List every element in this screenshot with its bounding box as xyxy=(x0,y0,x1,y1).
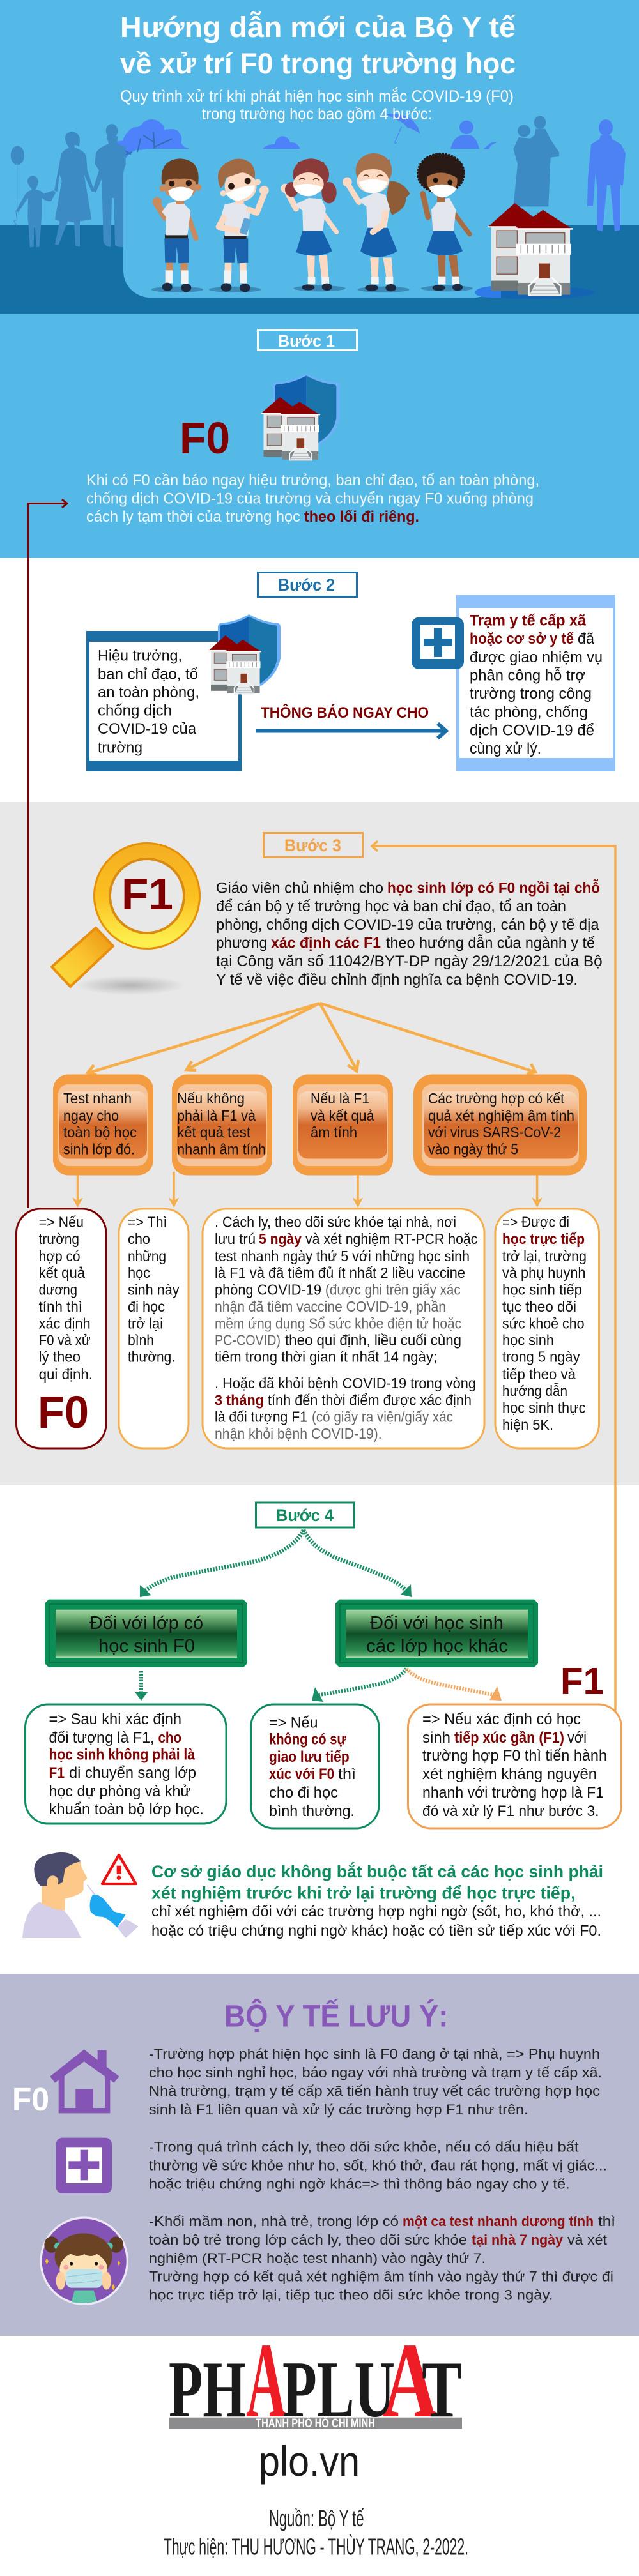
text block: step 3 description: Giáo viên chủ nhiệm cho xyxy=(216,880,383,897)
step 3 xyxy=(17,833,603,1448)
case 2: not F1 and negative xyxy=(172,1074,272,1175)
text block: school leadership: COVID-19 của xyxy=(98,720,197,738)
outcome: attend school directly: trở lại, trường xyxy=(502,1248,587,1264)
outcome: attend school directly: hướng dẫn xyxy=(502,1383,567,1399)
outcome: attend school directly: học sinh thực xyxy=(502,1400,586,1416)
outcome: F0 class: cho xyxy=(158,1729,181,1746)
student 2 xyxy=(209,159,269,292)
text block: note 2: -Trong quá trình cách ly, theo dõi sức khỏe, nếu có dấu hiệu bất xyxy=(149,2139,579,2155)
text block: step 3 description: Y tế về việc điều chỉnh định nghĩa ca bệnh COVID-19. xyxy=(216,971,578,989)
outcome: close contact: trường hợp F0 thì tiến hành xyxy=(422,1747,607,1764)
outcome: F0 class: di chuyển sang lớp xyxy=(69,1764,196,1782)
heading: Bước 4: Bước 4 xyxy=(276,1506,334,1525)
arrow: F1 return line to step 3 xyxy=(372,841,615,1711)
outcome: return to school normally: những xyxy=(128,1248,166,1264)
text block: medical station: được giao nhiệm vụ xyxy=(470,649,603,666)
text block: school leadership: chống dịch xyxy=(98,702,172,720)
outcome: attend school directly: học trực tiếp xyxy=(502,1231,585,1247)
text block: note 3: tại nhà 7 ngày xyxy=(472,2232,563,2248)
text block: note 1 xyxy=(149,2046,602,2118)
outcome: attend school directly: tục theo dõi xyxy=(502,1298,576,1315)
text block: note 1: -Trường hợp phát hiện học sinh là F0 đang ở tại nhà, => Phụ huynh xyxy=(149,2046,600,2062)
outcome: close contact: sinh xyxy=(422,1729,450,1746)
outcome: isolation conditions: nhận đã tiêm vaccine COVID-19, phần xyxy=(215,1298,446,1315)
arrow: to close contact case xyxy=(406,1669,502,1701)
outcome: no contact: bình thường. xyxy=(269,1803,355,1820)
case 1: test all class: ngay cho xyxy=(63,1107,119,1124)
text block: note 3: thì xyxy=(598,2213,615,2229)
icon: bright blue tree xyxy=(111,119,300,164)
outcome: positive F0: xác định xyxy=(39,1315,91,1332)
text block: note 3: học trực tiếp trở lại, tiếp tục theo dõi sức khỏe trong 3 ngày. xyxy=(149,2287,553,2303)
step 1 xyxy=(86,330,539,526)
outcome: return to school normally: cho xyxy=(128,1231,150,1247)
outcome: no contact: cho đi học xyxy=(269,1784,338,1801)
text block: medical station: Trạm y tế cấp xã xyxy=(470,612,587,629)
outcome: positive F0: tính thì xyxy=(39,1298,82,1315)
outcome: no contact: giao lưu tiếp xyxy=(269,1748,350,1766)
title xyxy=(120,11,516,80)
step 2 xyxy=(86,572,615,771)
website: plo.vn xyxy=(259,2437,360,2485)
outcome: no contact xyxy=(250,1704,379,1828)
text block: note 3: một ca test nhanh dương tính xyxy=(403,2213,594,2229)
arrow: down from F0 class xyxy=(135,1671,148,1701)
callout: testing not mandatory xyxy=(151,1861,603,1939)
logo: Pháp Luật: A xyxy=(246,2321,286,2440)
ministry notes xyxy=(12,1999,615,2304)
outcome: close contact xyxy=(408,1704,621,1828)
icon: parent and child silhouette right xyxy=(513,116,559,206)
text block: step 3 description: để cán bộ y tế trường học và ban chỉ đạo, tổ an toàn xyxy=(216,898,566,915)
student 1 xyxy=(151,158,203,292)
student 4 xyxy=(343,153,410,292)
outcome: positive F0: lý theo xyxy=(39,1349,81,1365)
group: students in other classes: Đối với học sinh xyxy=(370,1613,504,1633)
outcome: attend school directly: trong 5 ngày xyxy=(502,1349,580,1365)
step 4 xyxy=(26,1503,621,1828)
group: class with F0 xyxy=(45,1600,247,1667)
outcome: return to school normally: => Thì xyxy=(128,1214,167,1231)
text block: step 1 description: theo lối đi riêng. xyxy=(304,508,419,526)
outcome: return to school normally xyxy=(119,1209,189,1448)
outcome: isolation conditions xyxy=(203,1209,484,1448)
label: F0 large: F0 xyxy=(38,1388,89,1438)
case 4: negative on day 5 xyxy=(413,1074,587,1175)
case 1: test all class xyxy=(53,1074,153,1175)
outcome: isolation conditions: 5 ngày xyxy=(259,1231,302,1247)
arrows: dotted split to two groups xyxy=(140,1530,412,1597)
outcome: F0 class: học sinh không phải là xyxy=(49,1746,196,1764)
panel: header and step 1 background xyxy=(0,0,639,558)
text block: medical station: hoặc cơ sở y tế xyxy=(470,630,574,648)
panel: step 3 background xyxy=(0,802,639,1485)
panel: ministry notes background xyxy=(0,1974,639,2336)
text block: medical station: dịch COVID-19 để xyxy=(470,722,594,739)
outcome: return to school normally: học xyxy=(128,1264,150,1281)
case 2: not F1 and negative: Nếu không xyxy=(177,1090,245,1107)
outcome: attend school directly: sức khoẻ cho xyxy=(502,1315,584,1332)
case 1: test all class: Test nhanh xyxy=(63,1090,132,1107)
text block: note 1: sinh là F1 liên quan và xử lý các trường hợp F1 như trên. xyxy=(149,2102,528,2118)
logo: Pháp Luật: A xyxy=(382,2321,438,2440)
credits xyxy=(164,2505,468,2560)
subtitle: Quy trình xử trí khi phát hiện học sinh mắc COVID-19 (F0) xyxy=(120,87,514,105)
callout: testing not mandatory: xét nghiệm trước khi trở lại trường để học trực tiếp, xyxy=(151,1884,575,1903)
outcome: attend school directly: học sinh tiếp xyxy=(502,1282,582,1298)
outcome: return to school normally: trở lại xyxy=(128,1315,163,1332)
heading: Bước 4 xyxy=(256,1503,354,1527)
outcome: attend school directly: hiện 5K. xyxy=(502,1416,553,1433)
text block: step 1 description: cách ly tạm thời của trường học xyxy=(86,508,300,526)
case 3: F1 and negative xyxy=(293,1074,393,1175)
text block: note 1: Nhà trường, trạm y tế cấp xã tiến hành truy vết các trường hợp học xyxy=(149,2083,600,2099)
logo: Pháp Luật: THÀNH PHỐ HỒ CHÍ MINH xyxy=(256,2416,375,2430)
outcome: attend school directly: => Được đi xyxy=(502,1214,569,1231)
icon: family silhouette left xyxy=(11,124,126,247)
text block: note 3: nghiệm (RT-PCR hoặc test nhanh) vào ngày thứ 7. xyxy=(149,2250,486,2266)
text block: note 2: hoặc triệu chứng nghi ngờ khác=> thì thông báo ngay cho y tế. xyxy=(149,2176,570,2192)
outcome: isolation conditions: . Cách ly, theo dõi sức khỏe tại nhà, nơi xyxy=(215,1214,456,1231)
outcome: F0 class xyxy=(26,1704,226,1824)
panel: medical station xyxy=(456,595,615,771)
icon: shield and house small xyxy=(209,614,281,694)
heading: Bước 3: Bước 3 xyxy=(284,836,341,855)
outcome: isolation conditions: lưu trú xyxy=(215,1231,256,1247)
heading: Bước 2: Bước 2 xyxy=(278,575,335,595)
outcome: isolation conditions: và xét nghiệm RT-PCR hoặc xyxy=(305,1231,478,1247)
label: F0: F0 xyxy=(180,413,230,463)
text block: note 2 xyxy=(149,2139,607,2192)
outcome: positive F0: F0 và xử xyxy=(39,1332,91,1349)
outcome: close contact: nhanh với trường hợp là F1 xyxy=(422,1784,604,1801)
text block: step 3 description: phòng, chống dịch COVID-19 của trường, cán bộ y tế địa xyxy=(216,916,599,934)
text block: school leadership: Hiệu trưởng, xyxy=(98,647,182,664)
icon: shield and house xyxy=(261,374,340,460)
text block: medical station: trường trong công xyxy=(470,685,592,702)
text block: medical station: đã xyxy=(578,630,595,648)
outcome: positive F0 xyxy=(17,1209,106,1448)
outcome: no contact: => Nếu xyxy=(269,1714,318,1732)
outcome: isolation conditions: 3 tháng xyxy=(215,1392,264,1409)
arrow: to medical station xyxy=(256,724,446,738)
heading: Bước 1: Bước 1 xyxy=(278,331,335,351)
text block: note 3: và xét xyxy=(567,2232,608,2248)
logo: Pháp Luật: T xyxy=(422,2345,462,2434)
icon: medical cross xyxy=(412,617,464,669)
heading: ministry notes: BỘ Y TẾ LƯU Ý: xyxy=(224,1999,449,2033)
outcome: isolation conditions: mềm ứng dụng Sổ sức khỏe điện tử hoặc xyxy=(215,1315,461,1332)
text block: school leadership xyxy=(98,647,199,756)
icon: house xyxy=(50,2049,119,2113)
outcome: close contact: với xyxy=(567,1729,587,1746)
subtitle: trong trường học bao gồm 4 bước: xyxy=(202,105,432,123)
case 3: F1 and negative: Nếu là F1 xyxy=(311,1090,369,1107)
text block: step 1 description xyxy=(86,472,539,526)
title: Hướng dẫn mới của Bộ Y tế xyxy=(120,11,516,43)
title: về xử trí F0 trong trường học xyxy=(120,47,516,80)
arrow: F0 return line xyxy=(28,499,67,1208)
text block: school leadership: trường xyxy=(98,739,142,756)
student 3 xyxy=(281,158,346,291)
logo: Pháp Luật: PH xyxy=(169,2345,246,2434)
text block: note 3: -Khối mầm non, nhà trẻ, trong lớp có xyxy=(149,2213,399,2229)
icon: nasal swab test xyxy=(22,1852,139,1938)
house shadow xyxy=(475,286,595,299)
outcome: close contact: đó và xử lý F1 như bước 3. xyxy=(422,1803,599,1820)
outcome: isolation conditions: là đối tượng F1 xyxy=(215,1409,307,1425)
outcome: isolation conditions: test nhanh ngày thứ 5 với những học sinh xyxy=(215,1248,470,1264)
text block: step 3 description: phương xyxy=(216,935,267,952)
icon: man silhouette far right xyxy=(587,119,626,231)
text block: medical station: cùng xử lý. xyxy=(470,740,541,757)
outcome: positive F0: dương xyxy=(39,1282,77,1298)
arrow: to no contact case xyxy=(312,1669,406,1702)
outcome: attend school directly: tiếp theo và xyxy=(502,1366,576,1383)
text block: school leadership: an toàn phòng, xyxy=(98,684,199,701)
case 2: not F1 and negative: nhanh âm tính xyxy=(177,1141,266,1158)
text block: step 3 description: theo hướng dẫn của ngành y tế xyxy=(386,935,596,952)
case 2: not F1 and negative: phải là F1 và xyxy=(177,1107,256,1124)
outcome: isolation conditions: tính đến thời điểm được xác định xyxy=(268,1392,472,1409)
logo: Pháp Luật xyxy=(169,2321,462,2440)
outcome: positive F0: => Nếu xyxy=(39,1214,84,1231)
callout: testing not mandatory: hoặc có triệu chứng nghi ngờ khác) hoặc có tiền sử tiếp xúc với F0. xyxy=(151,1922,601,1939)
outcome: close contact: tiếp xúc gần (F1) xyxy=(454,1729,564,1746)
outcome: isolation conditions: PC-COVID) xyxy=(215,1332,281,1349)
panel: school leadership xyxy=(86,631,242,771)
case 3: F1 and negative: và kết quả xyxy=(311,1107,374,1124)
subtitle xyxy=(120,87,514,123)
outcome: F0 class: đối tượng là F1, xyxy=(49,1729,155,1746)
credits: Nguồn: Bộ Y tế xyxy=(269,2505,364,2531)
outcome: no contact: không có sự xyxy=(269,1731,347,1748)
text block: note 3 xyxy=(149,2213,615,2303)
text block: note 3: toàn bộ trẻ trong lớp cách ly, theo dõi sức khỏe xyxy=(149,2232,467,2248)
case 4: negative on day 5: vào ngày thứ 5 xyxy=(428,1141,518,1158)
callout: testing not mandatory: Cơ sở giáo dục không bắt buộc tất cả các học sinh phải xyxy=(151,1861,603,1881)
outcome: F0 class: => Sau khi xác định xyxy=(49,1711,181,1728)
icon: girl with mask xyxy=(41,2218,127,2304)
outcome: isolation conditions: . Hoặc đã khỏi bệnh COVID-19 trong vòng xyxy=(215,1375,476,1391)
group: students in other classes: các lớp học khác xyxy=(366,1636,508,1656)
outcome: attend school directly xyxy=(495,1209,599,1448)
outcome: F0 class: học dự phòng và khử xyxy=(49,1783,190,1800)
outcome: F0 class: khuẩn toàn bộ lớp học. xyxy=(49,1801,204,1818)
case 4: negative on day 5: với virus SARS-CoV-2 xyxy=(428,1124,561,1140)
case 4: negative on day 5: quả xét nghiệm âm tính xyxy=(428,1107,574,1124)
outcome: positive F0: qui định. xyxy=(39,1366,93,1383)
icon: magnifier with F1 xyxy=(52,843,199,995)
case 1: test all class: toàn bộ học xyxy=(63,1124,137,1140)
outcome: no contact: xúc với F0 xyxy=(269,1766,334,1783)
group: class with F0: học sinh F0 xyxy=(98,1636,195,1656)
logo: Pháp Luật: PLU xyxy=(282,2345,395,2434)
callout: testing not mandatory: chỉ xét nghiệm đối với các trường hợp nghi ngờ (sốt, ho, khó thở, ... xyxy=(151,1903,601,1920)
outcome: positive F0: kết quả xyxy=(39,1264,86,1281)
header illustration xyxy=(0,114,639,314)
outcome: isolation conditions: tiêm trong thời gian ít nhất 14 ngày; xyxy=(215,1349,437,1365)
outcome: positive F0: trường xyxy=(39,1231,79,1247)
label: F0 white: F0 xyxy=(12,2081,49,2118)
case 1: test all class: sinh lớp đó. xyxy=(63,1141,135,1158)
text block: step 3 description xyxy=(216,879,603,989)
outcome: attend school directly: và phụ huynh xyxy=(502,1264,585,1281)
outcome: isolation conditions: (có giấy ra viện/giấy xác xyxy=(312,1409,453,1425)
outcome: return to school normally: đi học xyxy=(128,1298,165,1315)
text block: note 2: thường về sức khỏe như ho, sốt, khó thở, đau rát họng, mất vị giác... xyxy=(149,2157,607,2173)
arrows: down to outcomes xyxy=(73,1172,542,1207)
case 3: F1 and negative: âm tính xyxy=(311,1124,357,1140)
icon: magnifier with F1: F1 xyxy=(121,869,173,919)
label: F1: F1 xyxy=(560,1660,604,1702)
outcome: close contact: => Nếu xác định có học xyxy=(422,1711,581,1728)
text block: step 3 description: tại Công văn số 11042/BYT-DP ngày 29/12/2021 của Bộ xyxy=(216,953,603,970)
arrows: fan-out to four cases xyxy=(88,1003,535,1075)
icon: school house xyxy=(488,203,573,296)
text block: step 3 description: xác định các F1 xyxy=(271,935,381,952)
text block: note 3: Trường hợp có kết quả xét nghiệm âm tính vào ngày thứ 7 thì được đi xyxy=(149,2268,613,2285)
rounded panel behind students xyxy=(123,149,501,298)
case 4: negative on day 5: Các trường hợp có kết xyxy=(428,1090,564,1107)
outcome: isolation conditions: là F1 và đã tiêm đủ ít nhất 2 liều vaccine xyxy=(215,1264,465,1281)
text block: step 1 description: Khi có F0 cần báo ngay hiệu trưởng, ban chỉ đạo, tổ an toàn phòng, xyxy=(86,472,539,489)
outcome: attend school directly: học sinh xyxy=(502,1332,554,1349)
group: students in other classes xyxy=(335,1600,538,1667)
text block: step 1 description: chống dịch COVID-19 của trường và chuyển ngay F0 xuống phòng xyxy=(86,490,534,507)
text block: medical station: tác phòng, chống xyxy=(470,704,588,721)
heading: Bước 2 xyxy=(258,572,357,596)
icon: medical cross purple xyxy=(56,2138,112,2193)
icon: warning triangle xyxy=(102,1855,136,1884)
outcome: return to school normally: thường. xyxy=(128,1349,175,1365)
group: class with F0: Đối với lớp có xyxy=(89,1613,203,1633)
text block: medical station: phân công hỗ trợ xyxy=(470,667,585,685)
outcome: no contact: thì xyxy=(338,1766,356,1783)
outcome: close contact: xét nghiệm kháng nguyên xyxy=(422,1766,597,1783)
case 2: not F1 and negative: kết quả test xyxy=(177,1124,250,1140)
text block: note 1: cho học sinh nghỉ học, báo ngay với nhà trường và trạm y tế cấp xã. xyxy=(149,2065,602,2080)
outcome: isolation conditions: (được ghi trên giấy xác xyxy=(325,1282,461,1298)
label: notify: THÔNG BÁO NGAY CHO xyxy=(261,704,429,722)
outcome: isolation conditions: theo qui định, liều cuối cùng xyxy=(285,1332,461,1349)
text block: school leadership: ban chỉ đạo, tổ xyxy=(98,666,198,683)
outcome: isolation conditions: phòng COVID-19 xyxy=(215,1282,321,1298)
student 5 xyxy=(418,154,473,291)
outcome: return to school normally: bình xyxy=(128,1332,154,1349)
outcome: return to school normally: sinh này xyxy=(128,1282,180,1298)
heading: Bước 3 xyxy=(263,833,363,857)
text block: medical station xyxy=(470,612,603,757)
icon: umbrella and child silhouettes xyxy=(385,114,497,149)
outcome: positive F0: hợp có xyxy=(39,1248,81,1264)
outcome: isolation conditions: nhận khỏi bệnh COVID-19). xyxy=(215,1425,382,1442)
outcome: F0 class: F1 xyxy=(49,1764,65,1782)
text block: step 3 description: học sinh lớp có F0 ngồi tại chỗ xyxy=(387,879,600,897)
heading: Bước 1 xyxy=(258,330,357,351)
